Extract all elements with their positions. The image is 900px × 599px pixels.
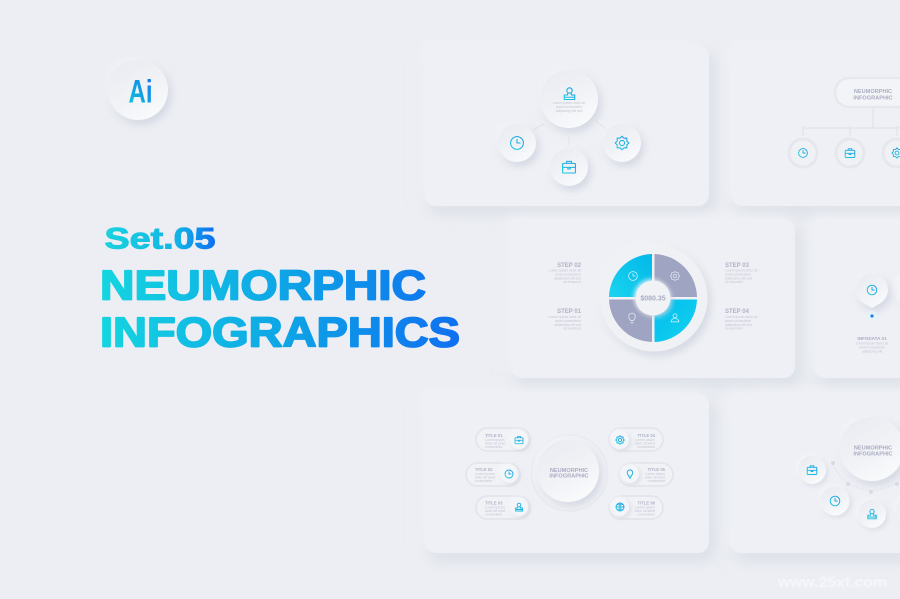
step 03 text: amet consectetur bbox=[725, 272, 752, 276]
step 02 text: amet consectetur bbox=[555, 272, 582, 276]
step 03 text: Lorem ipsum dolor sit bbox=[725, 268, 757, 272]
pill 05: TITLE 05 bbox=[648, 467, 666, 472]
pie icons bbox=[629, 272, 637, 280]
centre circle bbox=[537, 440, 599, 502]
main circle: NEUMORPHIC bbox=[854, 446, 892, 452]
step 04 text: STEP 04 bbox=[725, 309, 750, 315]
briefcase node bbox=[798, 456, 826, 484]
pill 04: dolor sit amet bbox=[635, 442, 655, 446]
pill 02 bbox=[466, 463, 520, 486]
clock node bbox=[820, 486, 850, 516]
step 01 text: amet consectetur bbox=[555, 319, 582, 323]
pill 06: consectetur bbox=[637, 512, 656, 516]
pill 03: dolor sit amet bbox=[485, 509, 505, 513]
pill 05 bbox=[619, 463, 673, 486]
step 03 text: adipiscing elit sed bbox=[725, 276, 752, 280]
pill 05: dolor sit amet bbox=[645, 476, 665, 480]
step 04 text bbox=[725, 309, 757, 330]
pill 05: consectetur bbox=[647, 479, 666, 483]
pill 02: TITLE 02 bbox=[475, 467, 493, 472]
pill 01: TITLE 01 bbox=[485, 433, 503, 438]
step 04 text: do eiusmod bbox=[725, 326, 743, 330]
gear circle bbox=[603, 124, 641, 162]
neighbouring pin bbox=[894, 274, 900, 306]
clock circle bbox=[498, 124, 536, 162]
pill 01 bbox=[476, 428, 530, 451]
clipped node bbox=[896, 496, 900, 524]
step 04 text: amet consectetur bbox=[725, 319, 752, 323]
step 01 text bbox=[549, 309, 582, 330]
pie chart bbox=[600, 244, 708, 352]
pill 03: TITLE 03 bbox=[485, 500, 503, 506]
step 02 text: do eiusmod bbox=[563, 280, 581, 284]
panel: hub with three satellites bbox=[425, 46, 709, 206]
heading: Set.05: Set.05 bbox=[104, 222, 216, 256]
timeline dot bbox=[867, 311, 877, 321]
pill 03: Lorem ipsum bbox=[485, 506, 505, 510]
step 04 text: adipiscing elit sed bbox=[725, 323, 752, 327]
connector lines bbox=[803, 107, 900, 136]
watermark: www.25xt.com bbox=[777, 574, 887, 591]
step 02 text: Lorem ipsum dolor sit bbox=[549, 268, 581, 272]
pill 06: Lorem ipsum bbox=[635, 506, 655, 510]
main circle bbox=[840, 417, 900, 481]
step 03 text: do eiusmod bbox=[725, 280, 743, 284]
pill 03: consectetur bbox=[485, 512, 503, 516]
title pill: NEUMORPHIC bbox=[854, 89, 892, 95]
pill 03 bbox=[476, 496, 530, 519]
step 01 text: Lorem ipsum dolor sit bbox=[549, 315, 581, 319]
step 02 text: adipiscing elit sed bbox=[554, 276, 581, 280]
main circle with user icon bbox=[540, 70, 598, 128]
pill 04: TITLE 04 bbox=[638, 433, 656, 438]
briefcase node bbox=[836, 139, 864, 167]
step 01 text: do eiusmod bbox=[563, 326, 581, 330]
pill 02: dolor sit amet bbox=[475, 476, 495, 480]
step 01 text: STEP 01 bbox=[557, 309, 582, 315]
dashed arc with dots bbox=[831, 461, 900, 494]
info text: Lorem ipsum dolor sit bbox=[856, 342, 888, 346]
clock pin bbox=[856, 274, 888, 308]
centre circle: INFOGRAPHIC bbox=[549, 474, 589, 480]
title: INFOGRAPHICS bbox=[100, 308, 460, 356]
ring bbox=[532, 435, 608, 511]
info text: INFODATA 01 bbox=[857, 336, 887, 341]
info text: adipiscing elit bbox=[862, 350, 882, 354]
step 03 text bbox=[725, 263, 757, 284]
step 03 text: STEP 03 bbox=[725, 263, 750, 269]
pill 01: Lorem ipsum bbox=[485, 438, 505, 442]
gear node bbox=[883, 139, 900, 167]
pill 04: consectetur bbox=[637, 445, 656, 449]
pill 06 bbox=[609, 496, 663, 519]
panel: pie chart with steps bbox=[511, 219, 795, 378]
panel: org chart bbox=[731, 46, 900, 206]
step 04 text: Lorem ipsum dolor sit bbox=[725, 315, 757, 319]
pie chart: $080.35 bbox=[640, 296, 666, 302]
main circle with user icon: Lorem ipsum dolor sit bbox=[553, 101, 585, 105]
panel: pin timeline bbox=[814, 219, 900, 378]
info text: amet consectetur bbox=[859, 346, 886, 350]
pill 04 bbox=[609, 428, 663, 451]
pill 02: consectetur bbox=[475, 479, 493, 483]
pill 02: Lorem ipsum bbox=[475, 472, 495, 476]
briefcase circle bbox=[550, 148, 588, 186]
pill 04: Lorem ipsum bbox=[635, 438, 655, 442]
pill 01: dolor sit amet bbox=[485, 442, 505, 446]
main circle with user icon: adipiscing elit sed bbox=[556, 109, 582, 113]
main circle: INFOGRAPHIC bbox=[853, 452, 893, 458]
panel: arc of nodes bbox=[730, 394, 900, 553]
pill 05: Lorem ipsum bbox=[645, 472, 665, 476]
main circle with user icon: amet consectetur bbox=[556, 105, 583, 109]
pie centre value bbox=[636, 280, 670, 316]
title pill: INFOGRAPHIC bbox=[853, 96, 893, 102]
pill 06: dolor sit amet bbox=[635, 509, 655, 513]
pill 01: consectetur bbox=[485, 445, 503, 449]
title bbox=[100, 262, 460, 356]
title pill bbox=[835, 78, 900, 107]
step 02 text: STEP 02 bbox=[557, 263, 582, 269]
panel: central hub with six pills bbox=[425, 394, 709, 553]
title: NEUMORPHIC bbox=[100, 262, 426, 308]
pill 06: TITLE 06 bbox=[638, 500, 656, 506]
centre circle: NEUMORPHIC bbox=[550, 468, 588, 474]
connector lines bbox=[533, 121, 607, 146]
badge: Ai bbox=[108, 60, 168, 120]
badge: Ai: Ai bbox=[128, 74, 152, 110]
step 02 text bbox=[549, 263, 582, 284]
info text bbox=[856, 336, 888, 354]
user node bbox=[858, 500, 886, 528]
step 01 text: adipiscing elit sed bbox=[554, 323, 581, 327]
clock node bbox=[789, 139, 817, 167]
